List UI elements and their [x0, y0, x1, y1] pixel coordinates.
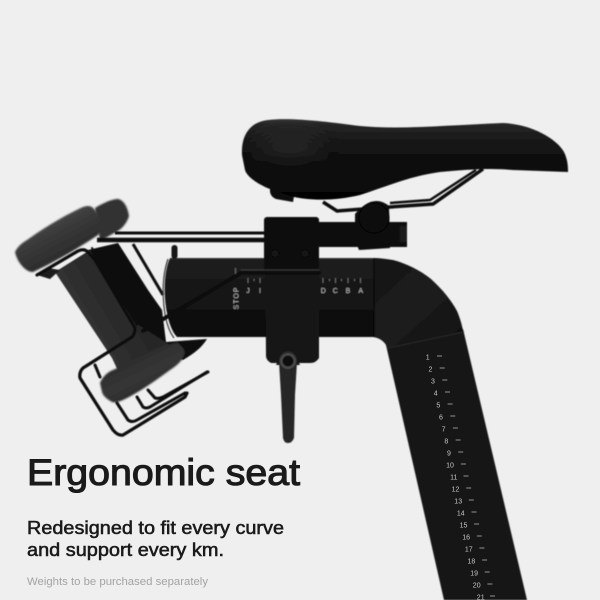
saddle — [242, 119, 568, 202]
height scale numbers: 3 — [431, 378, 435, 386]
height scale numbers: 17 — [465, 546, 473, 554]
height scale numbers: 20 — [473, 582, 481, 590]
height scale numbers: 18 — [468, 558, 475, 566]
title: Ergonomic seat — [27, 452, 301, 493]
height scale numbers: 14 — [457, 510, 465, 518]
height scale numbers: 11 — [450, 474, 458, 482]
dumbbell — [15, 206, 185, 402]
height scale numbers: 16 — [462, 534, 470, 542]
height scale numbers: 2 — [428, 366, 432, 374]
height scale numbers: 7 — [442, 426, 446, 434]
footnote: Weights to be purchased separately — [27, 576, 209, 588]
elbow joint — [373, 258, 463, 347]
description — [27, 518, 284, 560]
clamp band with handle — [264, 217, 319, 443]
wire weight cage and arm — [37, 248, 319, 435]
description: Redesigned to fit every curve — [27, 518, 284, 538]
description: and support every km. — [27, 540, 224, 560]
height scale numbers: 4 — [434, 390, 438, 398]
seat position scale letters: J — [246, 288, 250, 295]
seat position scale letters — [234, 268, 363, 309]
seat position scale letters: B — [346, 288, 351, 295]
height scale numbers: 13 — [454, 498, 462, 506]
height scale numbers: 10 — [446, 462, 454, 470]
seat clamp and rails — [319, 169, 483, 250]
seat position scale letters: A — [358, 288, 363, 295]
seat position scale letters: C — [333, 288, 338, 295]
seat position scale letters: D — [321, 288, 326, 295]
rear dumbbell behind — [88, 199, 207, 360]
seat position scale letters: STOP — [234, 287, 240, 309]
height scale numbers: 1 — [426, 354, 430, 362]
height scale numbers: 9 — [447, 450, 451, 458]
seat post with height scale — [386, 329, 527, 600]
bike seat assembly illustration — [15, 119, 568, 600]
height scale numbers: 8 — [444, 438, 448, 446]
horizontal seat tube — [163, 245, 374, 338]
height scale numbers: 12 — [452, 486, 459, 494]
height scale numbers: 6 — [439, 414, 443, 422]
height scale numbers: 5 — [436, 402, 440, 410]
seat position scale letters: I — [259, 288, 261, 295]
height scale ticks — [437, 356, 495, 596]
height scale numbers: 19 — [470, 570, 478, 578]
height scale numbers — [426, 354, 485, 600]
height scale numbers: 15 — [460, 522, 467, 530]
wire weight cage, top rods — [97, 233, 265, 240]
